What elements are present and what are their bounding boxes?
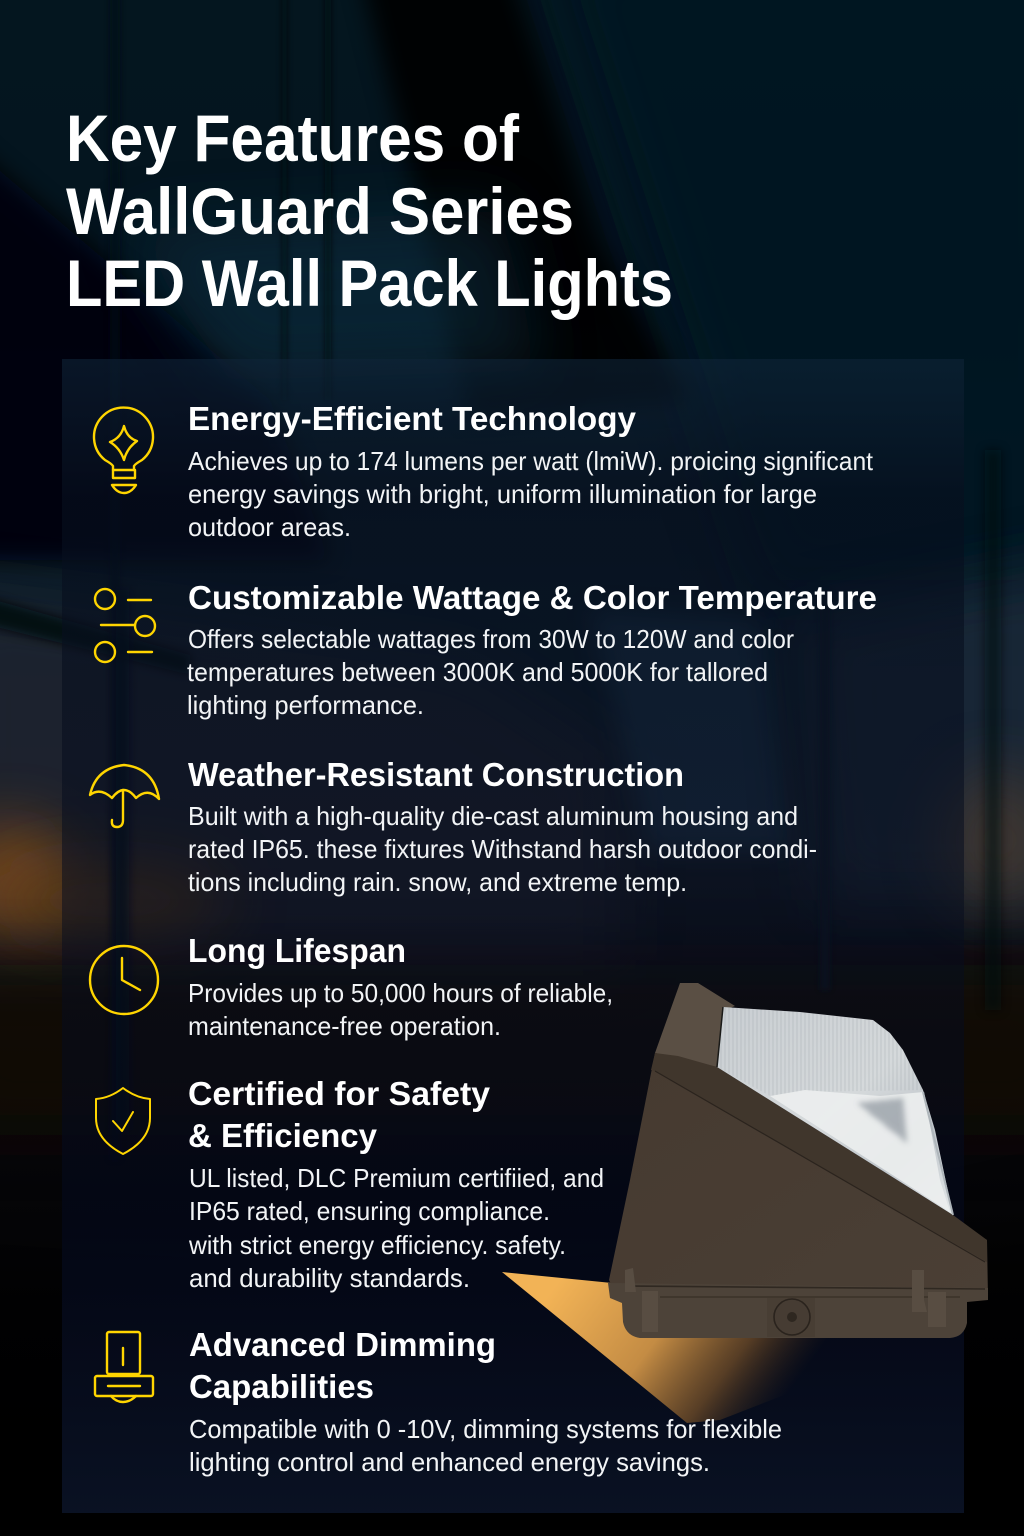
heading <box>188 1075 491 1154</box>
description: tions including rain. snow, and extreme temp. <box>188 867 687 897</box>
description: and durability standards. <box>189 1263 470 1293</box>
fixture side body <box>609 1053 988 1298</box>
feature 2: customizable wattage and color temperature <box>95 579 877 720</box>
description: outdoor areas. <box>188 512 351 542</box>
description: Offers selectable wattages from 30W to 120W and color <box>188 624 794 654</box>
heading: Capabilities <box>189 1368 374 1405</box>
fixture clips <box>625 1268 658 1332</box>
fixture round sensor <box>767 1298 815 1337</box>
title <box>66 101 673 320</box>
feature 5: certified for safety and efficiency <box>96 1075 604 1293</box>
title: WallGuard Series <box>66 174 574 248</box>
description <box>188 1163 604 1293</box>
icon: shield with check <box>96 1088 150 1154</box>
description: lighting control and enhanced energy savings. <box>189 1447 710 1477</box>
description: Achieves up to 174 lumens per watt (lmiW). proicing significant <box>188 446 874 476</box>
title: LED Wall Pack Lights <box>66 246 673 320</box>
description <box>187 624 794 720</box>
feature 1: energy-efficient technology <box>94 400 874 542</box>
description: lighting performance. <box>187 690 424 720</box>
description <box>188 801 817 897</box>
icon: dimmer switch and fixture <box>95 1332 153 1402</box>
feature 4: long lifespan <box>90 932 613 1041</box>
description: rated IP65. these fixtures Withstand harsh outdoor condi- <box>188 834 817 864</box>
description: UL listed, DLC Premium certifiied, and <box>189 1163 604 1193</box>
description: Built with a high-quality die-cast aluminum housing and <box>188 801 798 831</box>
heading <box>189 1326 496 1405</box>
description <box>188 446 874 542</box>
fixture: wall pack light <box>608 983 988 1338</box>
heading: Advanced Dimming <box>189 1326 496 1363</box>
heading: Customizable Wattage & Color Temperature <box>188 579 877 616</box>
fixture slope band <box>651 1053 987 1262</box>
heading: Weather-Resistant Construction <box>188 756 684 793</box>
description: IP65 rated, ensuring compliance. <box>189 1196 550 1226</box>
fixture base <box>608 1283 988 1338</box>
description: maintenance-free operation. <box>188 1011 501 1041</box>
description: energy savings with bright, uniform illumination for large <box>188 479 817 509</box>
panel: translucent feature list backing <box>62 359 964 1513</box>
title: Key Features of <box>66 101 520 175</box>
description: Provides up to 50,000 hours of reliable, <box>188 978 613 1008</box>
heading: Energy-Efficient Technology <box>188 400 637 437</box>
beam of warm light under fixture <box>502 1272 860 1423</box>
description <box>189 1414 782 1477</box>
description: Compatible with 0 -10V, dimming systems for flexible <box>189 1414 782 1444</box>
icon: light bulb <box>94 408 153 493</box>
fixture top hood <box>655 983 735 1067</box>
icon: umbrella <box>90 765 159 827</box>
description <box>188 978 613 1041</box>
fixture lens <box>717 1007 953 1215</box>
heading: & Efficiency <box>188 1117 378 1154</box>
feature 6: advanced dimming capabilities <box>95 1326 782 1477</box>
description: with strict energy efficiency. safety. <box>188 1230 566 1260</box>
heading: Long Lifespan <box>188 932 406 969</box>
description: temperatures between 3000K and 5000K for tallored <box>187 657 768 687</box>
feature 3: weather-resistant construction <box>90 756 817 897</box>
heading: Certified for Safety <box>188 1075 491 1112</box>
icon: clock <box>90 946 158 1014</box>
icon: sliders <box>95 589 155 662</box>
